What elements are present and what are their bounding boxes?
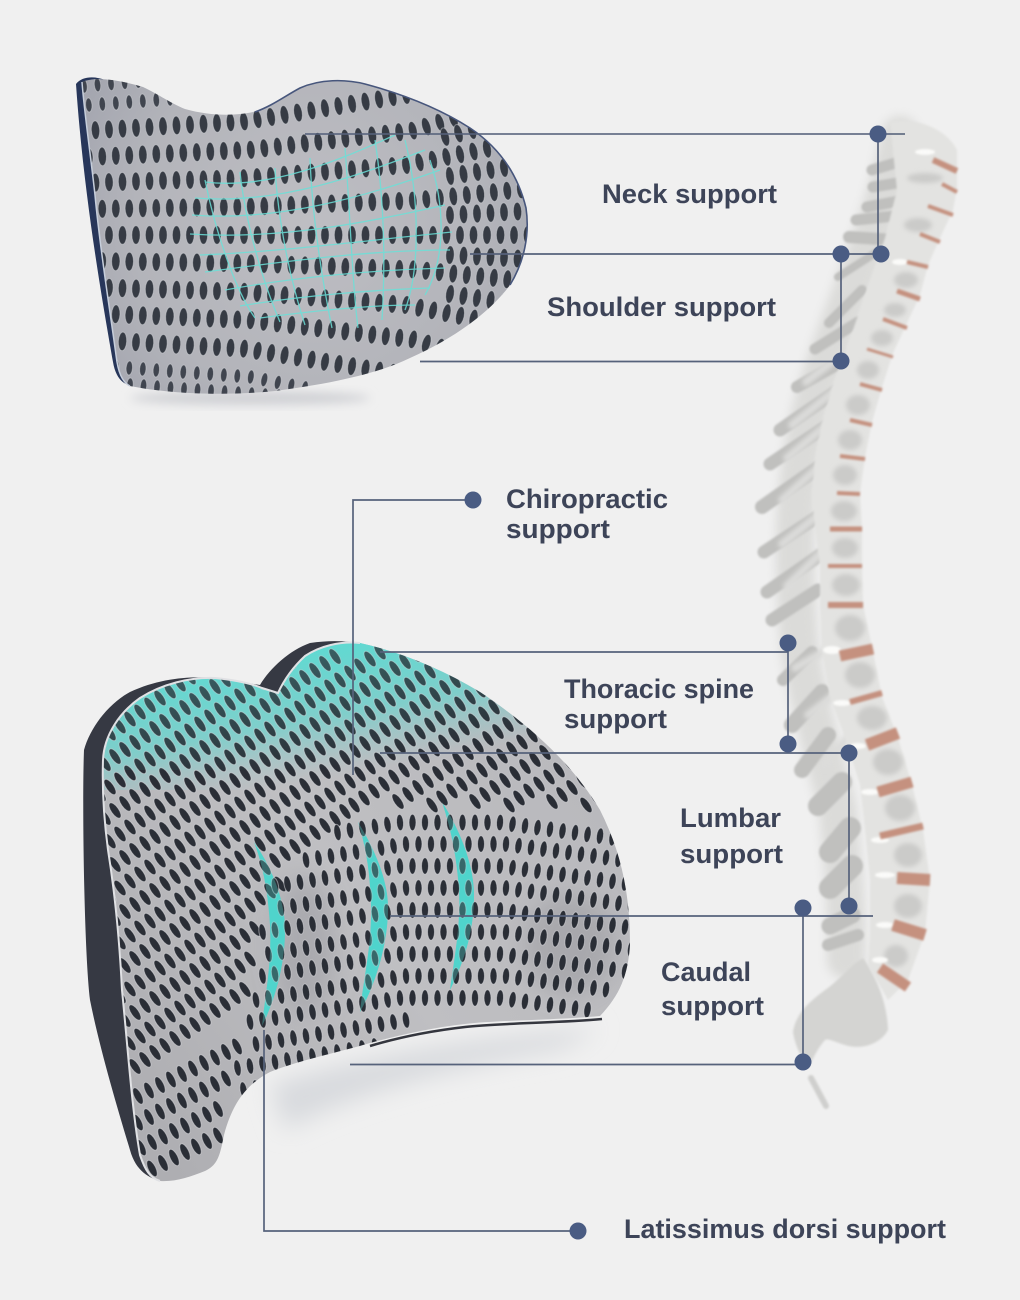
lumbar pillow: mesh body (90, 630, 644, 1190)
neck pillow: teal contour grid (190, 135, 452, 328)
label: chiropractic support (506, 484, 668, 544)
label: chiropractic support: Chiropractic (506, 484, 668, 514)
lumbar pillow: slanted hole rows, left and top (100, 648, 616, 1174)
lumbar pillow: bottom dark rim (370, 1019, 602, 1046)
label: thoracic spine support (564, 674, 754, 734)
spine: grey body shading (831, 173, 943, 967)
illustration: spine skeleton (762, 121, 957, 1106)
neck pillow: outer hole rows (84, 79, 305, 396)
neck pillow: top-right piping (255, 81, 527, 285)
spine: intervertebral discs (828, 160, 957, 987)
neck pillow: main hole rows (82, 95, 534, 375)
spine: posterior mass (795, 135, 900, 960)
neck pillow: mesh body (82, 79, 526, 394)
label: caudal support (661, 957, 764, 1021)
lumbar pillow: teal top glow (104, 643, 524, 790)
infographic canvas (76, 77, 959, 1244)
lumbar pillow: teal crescent veil (254, 802, 474, 1026)
connector lines (264, 134, 905, 1231)
label: chiropractic support: support (506, 514, 610, 544)
label: lumbar support: support (680, 839, 783, 869)
label: neck support: Neck support (602, 179, 777, 209)
label: shoulder support: Shoulder support (547, 292, 776, 322)
lumbar pillow: upright hole rows, centre and bottom (238, 822, 644, 1090)
neck pillow: ground shadow (130, 391, 370, 405)
lumbar pillow: ground shadow (270, 1028, 600, 1130)
spine: spinous processes (762, 158, 915, 945)
neck pillow: left piping (82, 82, 130, 386)
label: latissimus dorsi support: Latissimus dorsi support (624, 1214, 946, 1244)
label: caudal support: Caudal (661, 957, 751, 987)
neck pillow: navy side edge (76, 77, 135, 386)
label: lumbar support: Lumbar (680, 803, 781, 833)
lumbar pillow (83, 630, 644, 1190)
lumbar pillow: soft shading (275, 875, 615, 1015)
label: lumbar support (680, 803, 783, 869)
spine: process highlights (782, 352, 850, 765)
label: thoracic spine support: support (564, 704, 667, 734)
spine: bright articular highlights (823, 149, 935, 963)
lumbar pillow: teal crescent bands (254, 802, 474, 1026)
neck pillow (60, 60, 540, 410)
lumbar pillow: white piping (103, 643, 360, 1181)
lumbar pillow: teal veil over holes (104, 643, 516, 770)
marker dots (464, 126, 890, 1240)
label: thoracic spine support: Thoracic spine (564, 674, 754, 704)
label: caudal support: support (661, 991, 764, 1021)
spine: sacrum and coccyx (793, 958, 888, 1106)
lumbar pillow: dark back side (83, 641, 360, 1181)
spine: vertebral column (812, 121, 957, 1000)
